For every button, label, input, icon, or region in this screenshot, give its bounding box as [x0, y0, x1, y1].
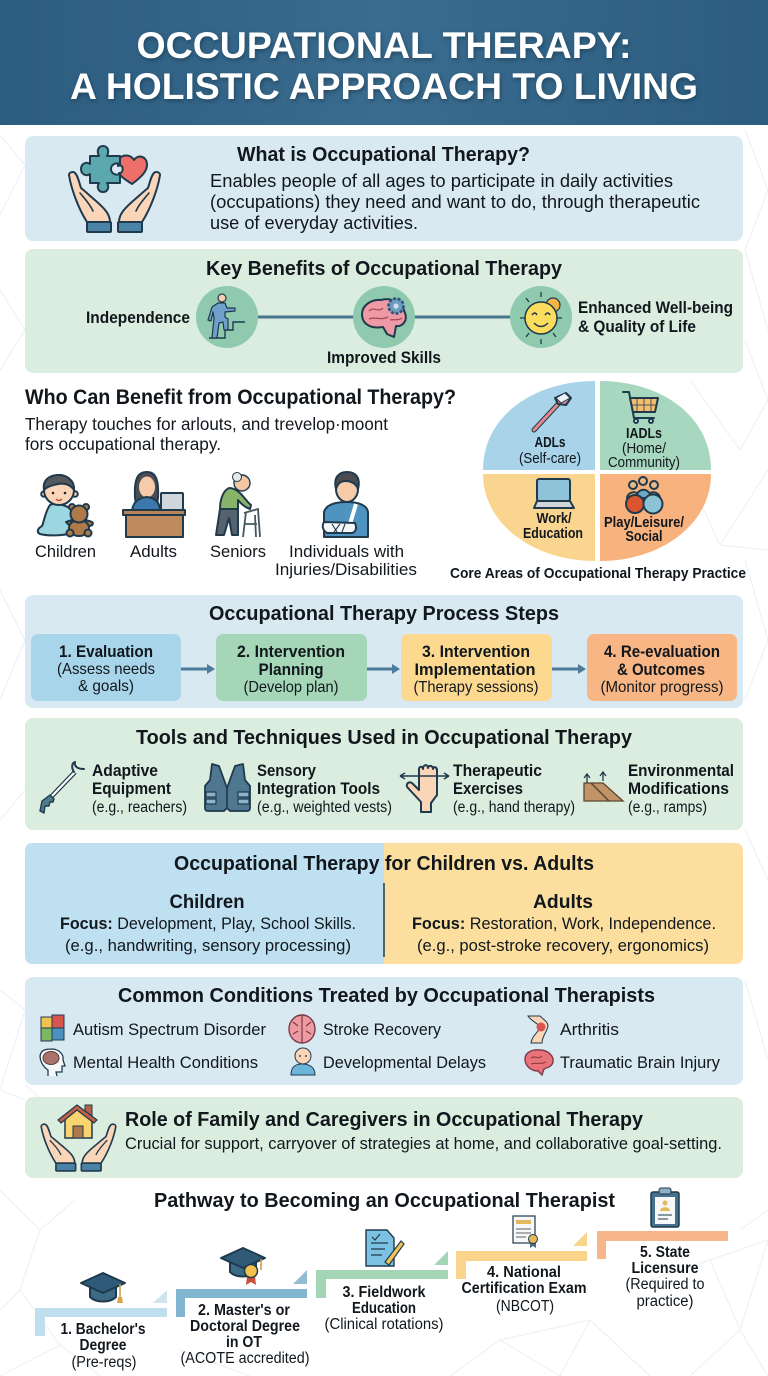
quadrant: IADLs: IADLs: [626, 426, 662, 442]
quadrant: IADLs: Community): [608, 455, 680, 471]
quadrant: play/leisure/social: Social: [626, 529, 662, 545]
step 2: master's or doctoral degree: Doctoral Degree: [190, 1318, 300, 1335]
description: use of everyday activities.: [210, 213, 418, 233]
chart: core areas of practice: [450, 381, 746, 582]
benefit: improved skills: [327, 286, 441, 367]
step 4: national certification exam: (NBCOT): [496, 1298, 554, 1315]
tool label: therapeutic exercises: (e.g., hand therapy): [453, 799, 575, 816]
quadrant: ADLs: ADLs: [534, 435, 566, 451]
step 3: Implementation: [414, 661, 536, 679]
tool label: environmental modifications: Modifications: [628, 780, 729, 798]
icon: puzzle piece and heart in hands: [69, 146, 160, 232]
step 5: state licensure: (Required to: [626, 1276, 704, 1293]
heading: Who Can Benefit from Occupational Therapy?: [25, 386, 456, 409]
header banner: [0, 0, 768, 125]
panel: what is occupational therapy: [25, 136, 743, 241]
description: (occupations) they need and want to do, through therapeutic: [210, 192, 700, 212]
benefit: independence: [86, 286, 258, 348]
chart caption: Core Areas of Occupational Therapy Practice: [450, 565, 746, 582]
quadrant: work/education: Education: [523, 526, 583, 542]
step 4: national certification exam: 4. National: [487, 1264, 561, 1281]
benefit: well-being: [510, 286, 733, 348]
description: Enables people of all ages to participate in daily activities: [210, 171, 673, 191]
description: Crucial for support, carryover of strategies at home, and collaborative goal-setting.: [125, 1135, 722, 1153]
panel: key benefits: [25, 249, 743, 373]
step 3: fieldwork education: [316, 1230, 448, 1333]
step 3: fieldwork education: Education: [352, 1300, 416, 1317]
column: children: Children: [170, 892, 244, 913]
title: [70, 25, 698, 107]
step 4: national certification exam: [456, 1216, 587, 1315]
step 5: state licensure: practice): [636, 1293, 694, 1310]
group labels: Adults: [130, 542, 177, 561]
tool label: environmental modifications: (e.g., ramps): [628, 799, 707, 816]
title: OCCUPATIONAL THERAPY:: [136, 25, 632, 66]
quadrant: play/leisure/social: Play/Leisure/: [604, 515, 684, 531]
heading: Tools and Techniques Used in Occupational Therapy: [136, 727, 633, 749]
quadrant: ADLs: (Self-care): [519, 451, 581, 467]
group labels: [35, 542, 417, 579]
description: [25, 414, 388, 454]
step 1: bachelor's degree: [35, 1273, 167, 1371]
benefit: independence: Independence: [86, 308, 190, 327]
column: adults: [412, 892, 716, 955]
condition: developmental delays: [291, 1048, 486, 1075]
step 2: [216, 634, 367, 701]
column: children: [60, 892, 356, 955]
step 3: fieldwork education: 3. Fieldwork: [342, 1284, 426, 1301]
step 2: (Develop plan): [244, 679, 338, 696]
quadrant: work/education: Work/: [536, 511, 572, 527]
heading: Common Conditions Treated by Occupational Therapists: [118, 985, 655, 1007]
tool: weighted vest: [205, 764, 250, 811]
panel: common conditions: [25, 977, 743, 1085]
condition: traumatic brain injury: [525, 1050, 721, 1075]
step 2: Planning: [258, 661, 324, 679]
tool label: therapeutic exercises: [453, 762, 575, 816]
step 2: master's or doctoral degree: 2. Master's or: [198, 1302, 290, 1319]
group labels: Seniors: [210, 542, 266, 561]
step 4: national certification exam: Certification Exam: [462, 1280, 586, 1297]
icon: senior with walker: [216, 472, 260, 537]
condition: arthritis: Arthritis: [560, 1021, 619, 1039]
heading: Occupational Therapy Process Steps: [209, 603, 559, 625]
condition: developmental delays: Developmental Delays: [323, 1054, 486, 1072]
tool label: sensory integration: (e.g., weighted vests): [257, 799, 392, 816]
heading: Role of Family and Caregivers in Occupational Therapy: [125, 1109, 644, 1131]
step 3: fieldwork education: (Clinical rotations): [324, 1316, 444, 1333]
tool label: environmental modifications: Environmental: [628, 762, 734, 780]
tool label: therapeutic exercises: Therapeutic: [453, 762, 542, 780]
connector line: [258, 316, 512, 318]
heading: What is Occupational Therapy?: [237, 144, 530, 166]
step 4: (Monitor progress): [600, 679, 724, 696]
icon: child with teddy bear: [38, 475, 93, 536]
tool: ramp: [584, 772, 623, 801]
column: adults: Focus: Restoration, Work, Independence.: [412, 915, 716, 933]
panel: role of family and caregivers: [25, 1097, 743, 1178]
column: adults: Adults: [533, 892, 593, 913]
step 2: master's or doctoral degree: [176, 1248, 310, 1367]
section: who can benefit: [25, 386, 456, 579]
heading: Key Benefits of Occupational Therapy: [206, 258, 563, 280]
quadrant: IADLs: [600, 381, 711, 471]
step 5: state licensure: [597, 1188, 728, 1310]
tool label: therapeutic exercises: Exercises: [453, 780, 523, 798]
step 1: (Assess needs: [57, 661, 155, 678]
benefit: well-being: & Quality of Life: [578, 317, 696, 336]
icon: adult at desk: [123, 472, 185, 537]
step 1: & goals): [78, 678, 134, 695]
step 4: [587, 634, 737, 701]
description: fors occupational therapy.: [25, 434, 221, 454]
icon: house in hands: [41, 1105, 116, 1171]
section: pathway to becoming an OT: [35, 1188, 728, 1371]
tool label: adaptive equipment: Adaptive: [92, 762, 158, 780]
panel: children vs adults: [25, 843, 743, 964]
description: Therapy touches for arlouts, and trevelop·moont: [25, 414, 388, 434]
step 5: state licensure: Licensure: [632, 1260, 699, 1277]
condition: mental health: Mental Health Conditions: [73, 1054, 258, 1072]
arrow: [552, 664, 586, 674]
icon: person with arm sling: [323, 472, 368, 537]
panel: tools and techniques: [25, 718, 743, 830]
step 1: 1. Evaluation: [59, 643, 153, 661]
quadrant: ADLs: [483, 381, 595, 470]
panel: process steps: [25, 595, 743, 708]
condition: stroke: [289, 1015, 442, 1043]
step 4: & Outcomes: [617, 661, 705, 679]
arrow: [181, 664, 215, 674]
step 2: master's or doctoral degree: (ACOTE accredited): [180, 1350, 310, 1367]
step 3: [401, 634, 552, 701]
step 1: [31, 634, 181, 701]
condition: arthritis: [528, 1016, 619, 1043]
quadrant: IADLs: (Home/: [622, 441, 667, 457]
title: A HOLISTIC APPROACH TO LIVING: [70, 66, 698, 107]
column: children: (e.g., handwriting, sensory processing): [65, 937, 351, 955]
description: [210, 171, 700, 233]
group labels: Injuries/Disabilities: [275, 560, 417, 579]
tool label: sensory integration: Sensory: [257, 762, 317, 780]
column: adults: (e.g., post-stroke recovery, ergonomics): [417, 937, 709, 955]
heading: Occupational Therapy for Children vs. Adults: [174, 853, 594, 875]
tool label: environmental modifications: [628, 762, 734, 816]
tool label: sensory integration: Integration Tools: [257, 780, 380, 798]
step 4: 4. Re-evaluation: [604, 643, 720, 661]
quadrant: work/education: [483, 474, 595, 561]
step 3: (Therapy sessions): [414, 679, 538, 696]
tool: hand therapy: [400, 765, 449, 812]
benefit: well-being: Enhanced Well-being: [578, 298, 733, 317]
group labels: Children: [35, 542, 96, 561]
heading: Pathway to Becoming an Occupational Therapist: [154, 1190, 615, 1212]
tool label: adaptive equipment: Equipment: [92, 780, 171, 798]
tool label: adaptive equipment: (e.g., reachers): [92, 799, 187, 816]
arrow: [367, 664, 400, 674]
group labels: Individuals with: [289, 542, 404, 561]
step 1: bachelor's degree: 1. Bachelor's: [60, 1321, 146, 1338]
column: children: Focus: Development, Play, School Skills.: [60, 915, 356, 933]
tool label: adaptive equipment: [92, 762, 187, 816]
step 3: 3. Intervention: [422, 643, 530, 661]
tool label: sensory integration: [257, 762, 392, 816]
step 1: bachelor's degree: (Pre-reqs): [72, 1354, 136, 1371]
benefit: improved skills: Improved Skills: [327, 348, 441, 367]
tool: adaptive equipment: [40, 762, 84, 813]
step 5: state licensure: 5. State: [640, 1244, 690, 1261]
condition: autism: [41, 1015, 266, 1041]
condition: stroke: Stroke Recovery: [323, 1021, 442, 1039]
step 1: bachelor's degree: Degree: [80, 1337, 127, 1354]
condition: traumatic brain injury: Traumatic Brain Injury: [560, 1054, 721, 1072]
condition: autism: Autism Spectrum Disorder: [73, 1021, 266, 1039]
step 2: 2. Intervention: [237, 643, 345, 661]
step 2: master's or doctoral degree: in OT: [226, 1334, 262, 1351]
quadrant: play/leisure/social: [600, 474, 711, 561]
condition: mental health: [40, 1049, 258, 1076]
